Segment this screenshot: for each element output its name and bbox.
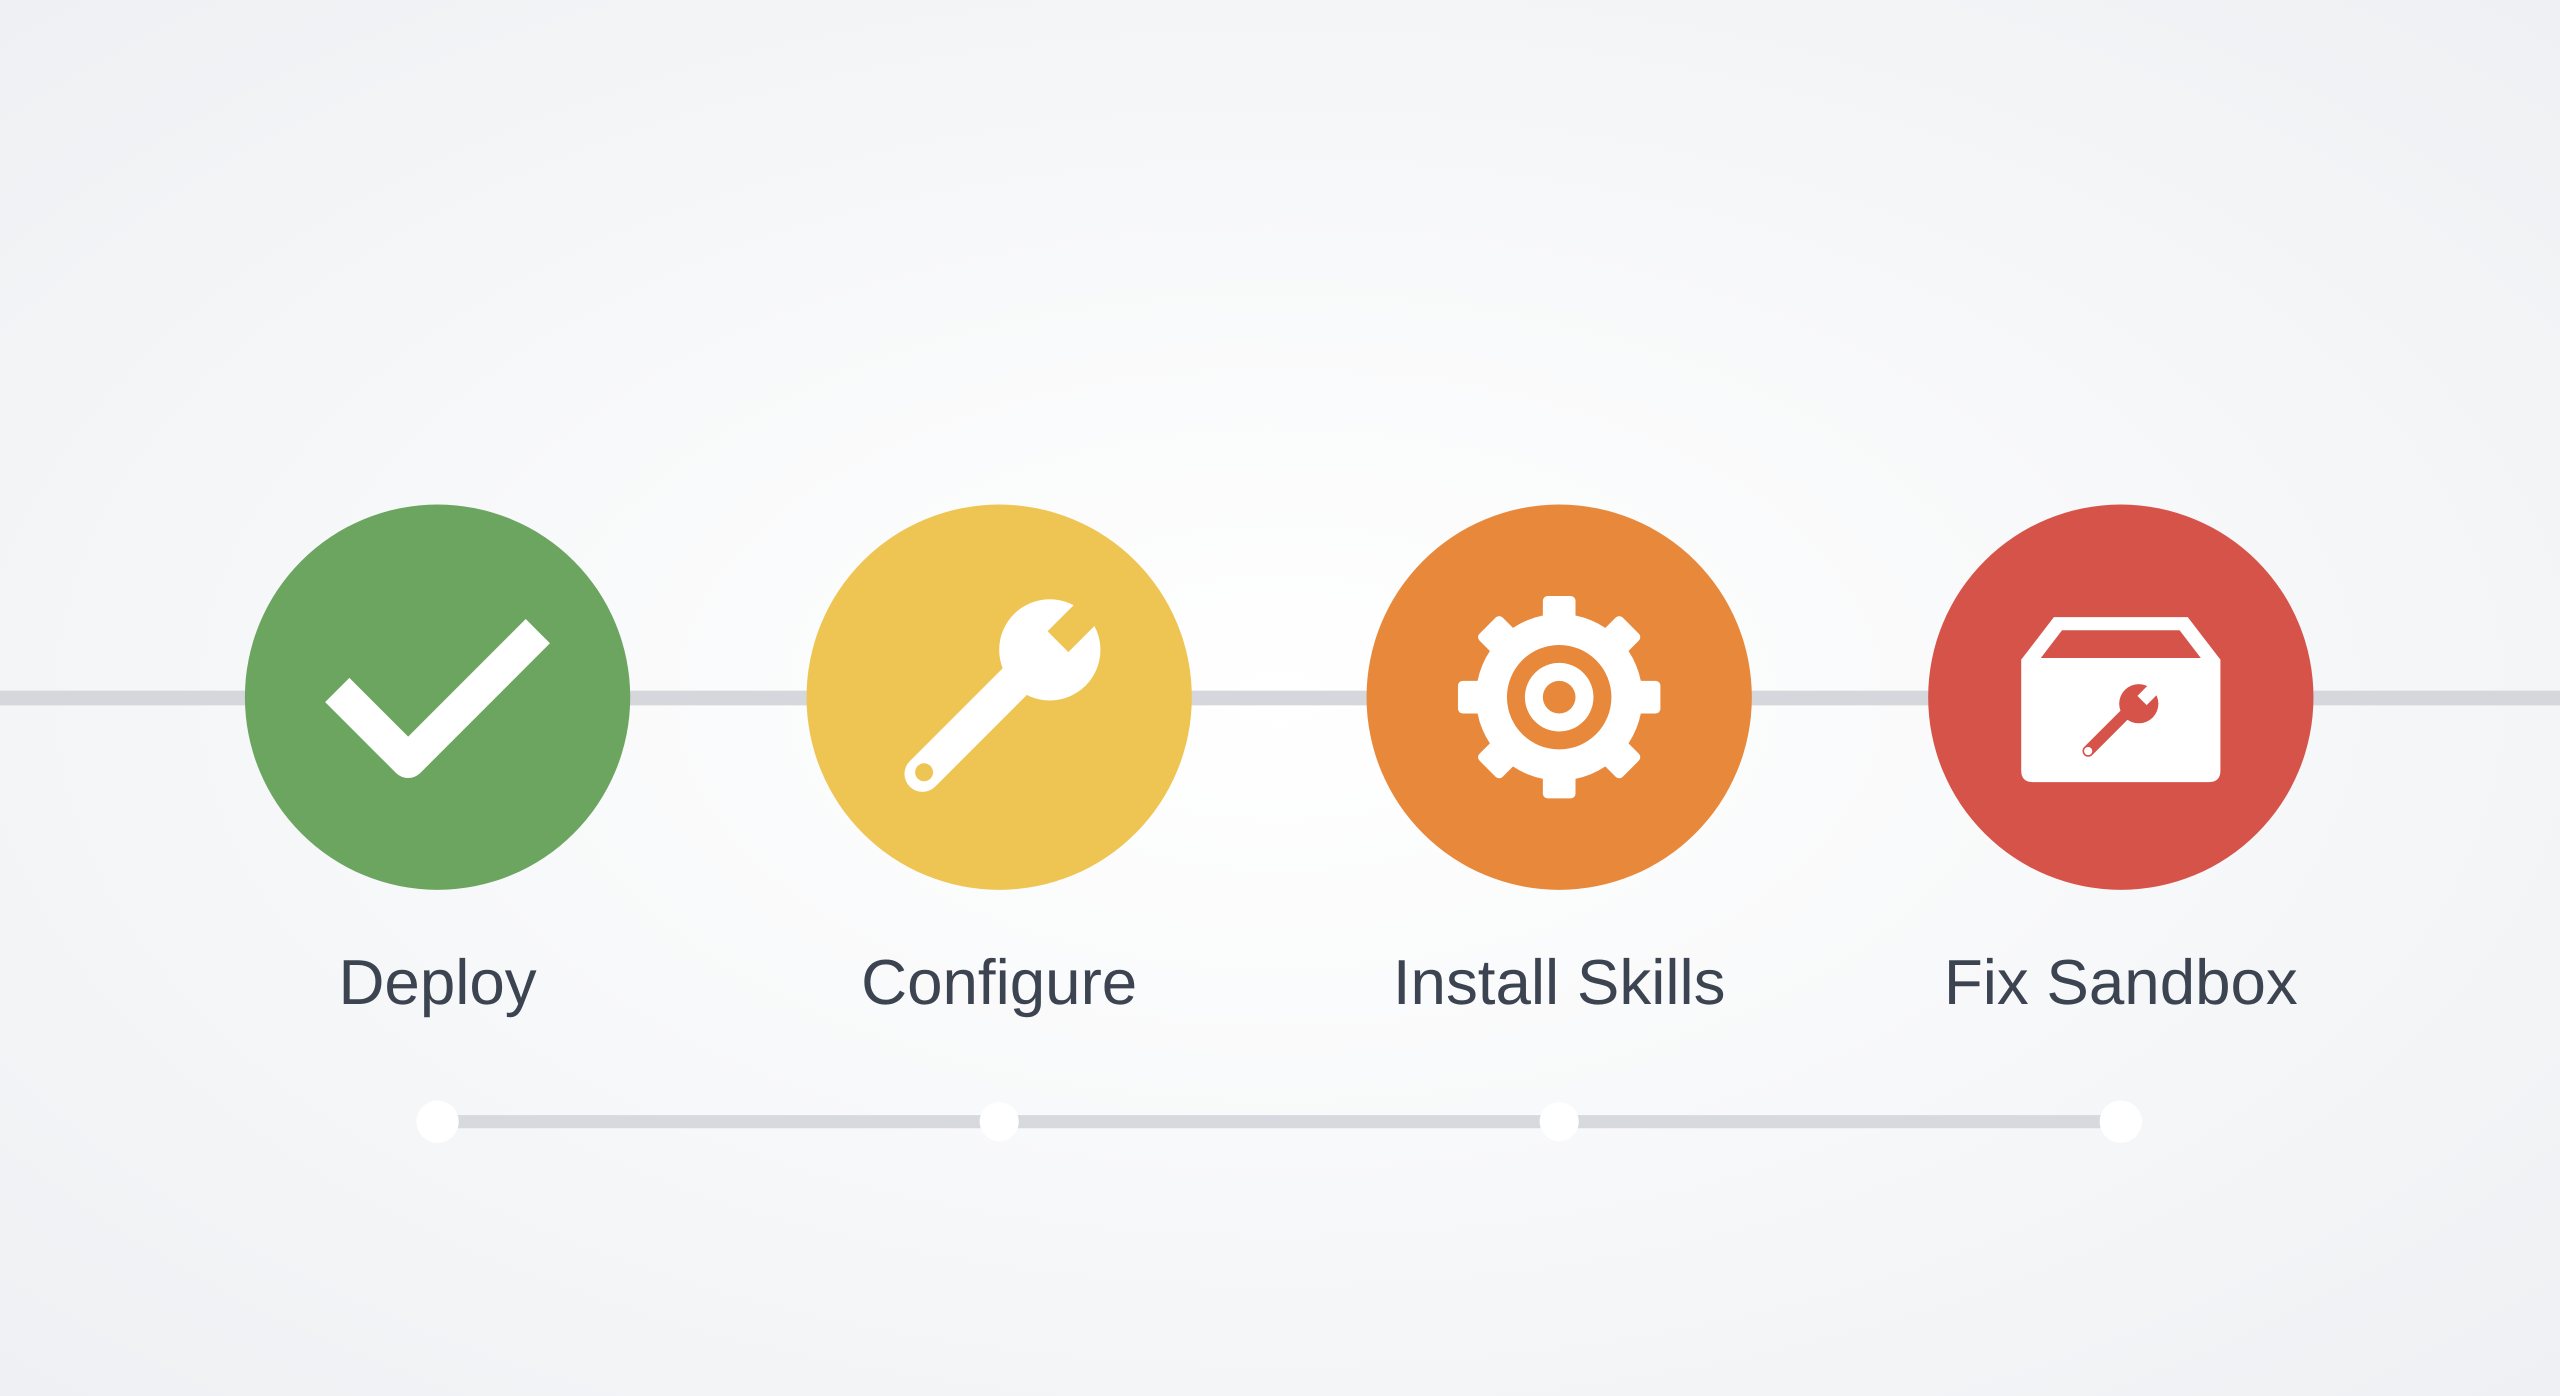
label: Deploy: Deploy [338,949,537,1019]
step 2: Configure [807,505,1192,1019]
icon: box with wrench [2021,617,2220,782]
label: Configure: Configure [861,949,1137,1019]
label: Install Skills: Install Skills [1393,949,1725,1019]
label: Fix Sandbox: Fix Sandbox [1944,949,2299,1019]
main connector line [0,691,2560,705]
step 4: Fix Sandbox [1928,505,2313,1019]
icon: wrench [915,585,1115,781]
step 3: Install Skills [1367,505,1752,1019]
icon: gear [1458,596,1660,798]
icon: check mark [349,643,526,761]
progress track [416,1100,2142,1143]
step 1: Deploy [245,505,630,1019]
